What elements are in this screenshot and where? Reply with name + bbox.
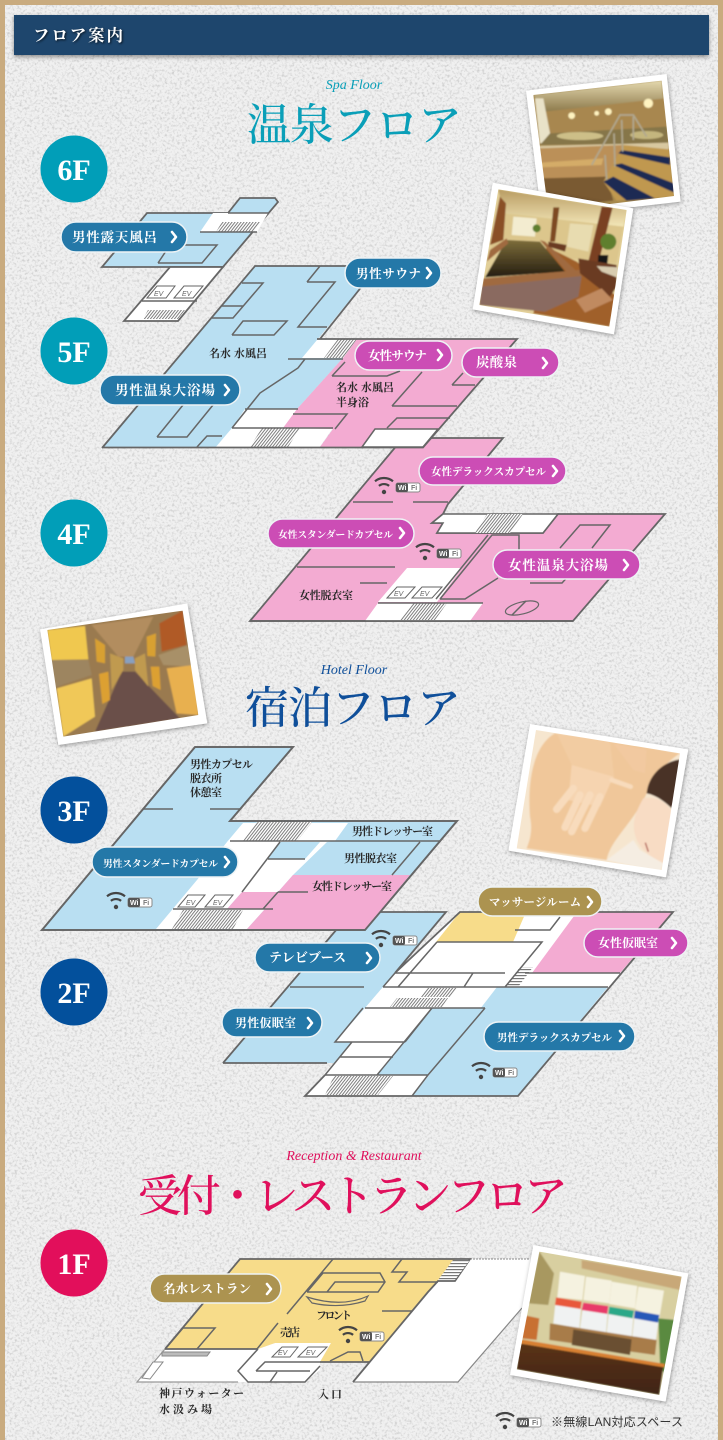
room labels 1F: フロント (316, 1310, 352, 1322)
photo: reception desk (510, 1245, 688, 1402)
pill: men's open-air bath (61, 222, 187, 252)
pill: men's open-air bath: 男性露天風呂 (72, 229, 157, 245)
floor plan 4F: EV (394, 591, 405, 598)
pill: men's deluxe capsule (484, 1022, 635, 1051)
floor badge 1F (40, 1230, 108, 1296)
floor badge 2F (40, 958, 108, 1026)
pill: women's nap room: 女性仮眠室 (598, 935, 658, 950)
pill: men's sauna: 男性サウナ (356, 266, 421, 281)
wifi icon 1F: Wi (362, 1334, 371, 1341)
pill: men's nap room: 男性仮眠室 (235, 1015, 296, 1030)
wifi icon 2F upper: Fi (408, 938, 414, 945)
floor plan 3F: EV (213, 900, 224, 907)
pill: massage room: マッサージルーム (489, 896, 581, 909)
floor badge 4F (40, 500, 108, 566)
room labels 1F (159, 1310, 352, 1416)
pill: women's sauna: 女性サウナ (368, 348, 427, 363)
room labels 3F: 休憩室 (190, 785, 222, 799)
heading: hotel floor: 宿泊フロア (245, 684, 461, 733)
room labels 5F: 名水 水風呂 (336, 380, 394, 394)
heading: hotel floor: Hotel Floor (320, 663, 388, 678)
floor plan 1F: EV (306, 1350, 317, 1357)
room labels 3F: 男性脱衣室 (344, 851, 397, 865)
pill: women's hot spring bath: 女性温泉大浴場 (508, 557, 608, 573)
floor plan 6F: EV (182, 291, 193, 298)
room labels 3F: 男性ドレッサー室 (352, 824, 433, 838)
floor badge 5F (40, 318, 108, 384)
floor badge 4F: 4F (57, 518, 91, 551)
pill: men's nap room (222, 1008, 322, 1037)
pill: TV booth: テレビブース (269, 950, 346, 965)
legend: wifi space note: Fi (532, 1420, 538, 1427)
room label 4F: 女性脱衣室 (299, 588, 353, 602)
pill: carbonated spring: 炭酸泉 (476, 354, 518, 370)
wifi icon 4F lower: Fi (452, 551, 458, 558)
wifi icon 2F upper: Wi (395, 938, 404, 945)
floor badge 2F: 2F (57, 977, 91, 1010)
floor plan 4F: EV (420, 591, 431, 598)
wifi icon 2F lower: Wi (495, 1070, 504, 1077)
legend: wifi space note (496, 1413, 683, 1429)
pill: men's sauna (345, 258, 441, 288)
pill: women's hot spring bath (493, 550, 640, 579)
room labels 1F: 入口 (318, 1388, 342, 1401)
wifi icon 2F lower: Fi (508, 1070, 514, 1077)
wifi icon 4F upper (375, 478, 420, 494)
pill: men's standard capsule: 男性スタンダードカプセル (103, 857, 218, 870)
page header bar: フロア案内 (33, 25, 123, 45)
legend: wifi space note: Wi (519, 1420, 528, 1427)
photo: back massage (508, 723, 688, 877)
floor plan 1F (137, 1259, 530, 1382)
floor badge 6F: 6F (57, 154, 91, 187)
wifi icon 2F upper (372, 931, 417, 947)
pill: women's standard capsule (268, 519, 414, 548)
pill: men's hot spring bath: 男性温泉大浴場 (115, 382, 216, 398)
floor badge 3F (40, 776, 108, 844)
pill: women's deluxe capsule (419, 457, 566, 485)
wifi icon 3F: Wi (130, 900, 139, 907)
pill: women's nap room (584, 929, 688, 957)
page header bar (14, 15, 709, 55)
room labels 5F: 半身浴 (336, 395, 370, 409)
wifi icon 4F lower (416, 544, 461, 560)
photo: stone bath with wood deck (473, 183, 633, 334)
photo: large bath with steps (520, 74, 681, 218)
pill: men's standard capsule (92, 847, 238, 877)
pill: men's deluxe capsule: 男性デラックスカプセル (497, 1031, 612, 1044)
pill: massage room (478, 887, 602, 916)
heading: spa floor (247, 78, 462, 150)
heading: spa floor: Spa Floor (326, 78, 383, 93)
floor plan 3F (42, 747, 457, 930)
floor plan 1F: EV (278, 1350, 289, 1357)
pill: women's standard capsule: 女性スタンダードカプセル (278, 528, 393, 541)
pill: meisui restaurant (150, 1274, 281, 1303)
floor plan 2F (223, 912, 673, 1096)
wifi icon 1F: Fi (375, 1334, 381, 1341)
photo: capsule corridor (40, 603, 207, 745)
room labels 3F: 女性ドレッサー室 (312, 879, 392, 893)
room labels 3F: 男性カプセル (190, 757, 253, 771)
pill: women's sauna (355, 341, 452, 370)
floor plan 6F (102, 198, 278, 321)
wifi icon 1F (339, 1327, 384, 1343)
wifi icon 4F upper: Wi (398, 485, 407, 492)
wifi icon 3F: Fi (143, 900, 149, 907)
room labels 1F: 売店 (280, 1325, 300, 1339)
wifi icon 4F lower: Wi (439, 551, 448, 558)
pill: meisui restaurant: 名水レストラン (163, 1281, 251, 1296)
pill: TV booth (255, 943, 380, 972)
pill: men's hot spring bath (100, 375, 240, 405)
heading: spa floor: 温泉フロア (247, 101, 462, 150)
floor plan 4F (250, 438, 665, 621)
room labels 5F: 名水 水風呂 (209, 346, 267, 360)
floor badge 6F (40, 136, 108, 202)
room labels 3F (190, 757, 433, 893)
room labels 3F: 脱衣所 (190, 771, 222, 785)
floor badge 3F: 3F (57, 795, 91, 828)
wifi icon 3F (107, 893, 152, 909)
floor plan 3F: EV (186, 900, 197, 907)
legend: wifi space note: ※無線LAN対応スペース (551, 1414, 683, 1429)
room labels 5F (209, 346, 394, 409)
heading: reception and restaurant floor: Reception & Restaurant (285, 1149, 423, 1164)
heading: reception and restaurant floor (138, 1149, 568, 1221)
room labels 1F: 水汲み場 (159, 1402, 212, 1416)
heading: reception and restaurant floor: 受付・レストランフロア (138, 1172, 568, 1221)
floor plan 5F (102, 266, 517, 448)
floor badge 1F: 1F (57, 1248, 91, 1281)
room labels 1F: 神戸ウォーター (159, 1386, 244, 1400)
wifi icon 2F lower (472, 1063, 517, 1079)
pill: carbonated spring (462, 348, 559, 377)
pill: women's deluxe capsule: 女性デラックスカプセル (431, 465, 546, 478)
floor badge 5F: 5F (57, 336, 91, 369)
wifi icon 4F upper: Fi (411, 485, 417, 492)
floor plan 6F: EV (154, 291, 165, 298)
